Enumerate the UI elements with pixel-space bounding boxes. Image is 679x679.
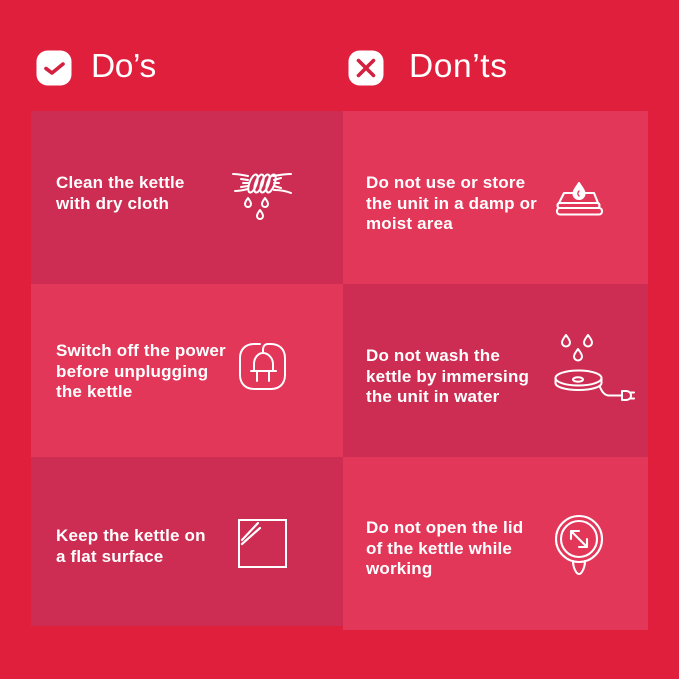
text: switch off power: the kettle	[56, 382, 132, 401]
text: damp area	[366, 173, 537, 233]
icon: flat surface	[238, 519, 287, 568]
text: do not open lid: Do not open the lid	[366, 518, 523, 537]
icon: lid dial	[554, 515, 604, 575]
text: damp area: the unit in a damp or	[366, 194, 537, 212]
text: switch off power	[56, 341, 226, 401]
text: do not open lid: working	[366, 559, 432, 578]
text: clean with dry cloth	[56, 173, 185, 212]
text: damp area: moist area	[366, 214, 453, 233]
panel: clean with dry cloth	[31, 111, 343, 284]
text: flat surface: Keep the kettle on	[56, 526, 206, 545]
heading: Do's: Do’s	[91, 48, 156, 85]
panel: do not immerse	[343, 284, 648, 457]
text: do not immerse: Do not wash the	[366, 346, 500, 365]
text: switch off power: Switch off the power	[56, 341, 226, 360]
icon: cross badge	[348, 50, 384, 86]
text: do not open lid	[366, 518, 523, 578]
text: clean with dry cloth: with dry cloth	[56, 194, 169, 212]
text: do not immerse: kettle by immersing	[366, 366, 529, 386]
panel: flat surface	[31, 457, 343, 626]
panel: switch off power	[31, 284, 343, 457]
icon: wrung cloth	[232, 173, 292, 220]
text: damp area: Do not use or store	[366, 173, 525, 192]
text: do not immerse	[366, 346, 529, 406]
icon: plug	[239, 343, 286, 390]
text: do not open lid: of the kettle while	[366, 538, 512, 558]
text: flat surface	[56, 526, 206, 566]
heading: Don'ts: Don’ts	[409, 48, 508, 85]
text: do not immerse: the unit in water	[366, 387, 499, 406]
panel: do not open lid	[343, 457, 648, 630]
icon: damp stack	[556, 182, 604, 216]
text: switch off power: before unplugging	[56, 362, 208, 380]
icon: water on base with plug	[554, 334, 635, 401]
icon: check badge	[36, 50, 72, 86]
text: clean with dry cloth: Clean the kettle	[56, 173, 185, 192]
panel: damp area	[343, 111, 648, 284]
text: flat surface: a flat surface	[56, 546, 163, 566]
